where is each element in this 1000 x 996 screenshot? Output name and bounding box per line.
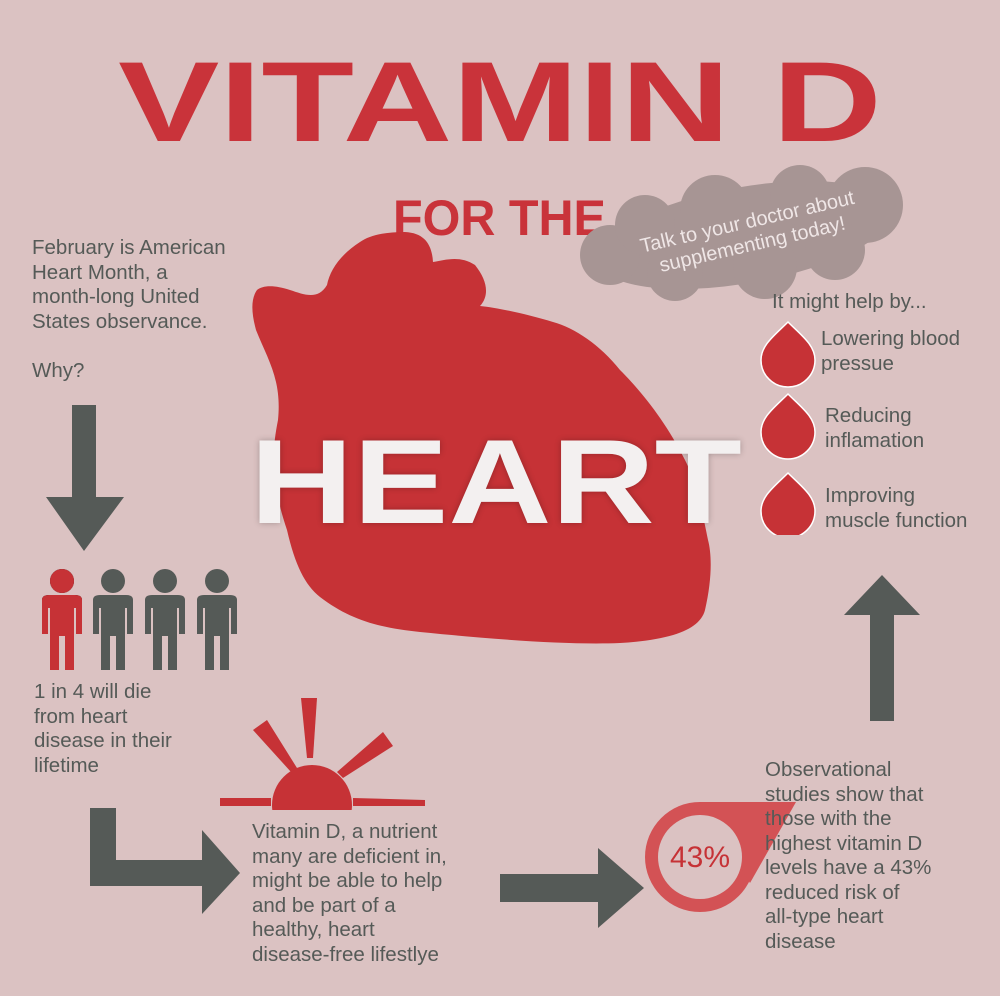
text: intro: Heart Month, a: [32, 260, 168, 284]
list: benefits: pressue: [821, 352, 894, 374]
text: observational: levels have a 43%: [765, 856, 931, 879]
list: benefits: Reducing: [825, 404, 912, 427]
text: vitamin D nutrient: and be part of a: [252, 894, 396, 916]
subtitle: for the: FOR THE: [393, 190, 606, 246]
arrow: right: [500, 848, 644, 928]
text: vitamin D nutrient: Vitamin D, a nutrient: [252, 820, 437, 843]
text: intro: [32, 236, 226, 382]
text: vitamin D nutrient: many are deficient in,: [252, 844, 447, 868]
text: observational: disease: [765, 930, 836, 952]
text: observational: [765, 758, 931, 952]
text: 1 in 4: 1 in 4 will die: [34, 680, 151, 703]
title: VITAMIN D: [118, 39, 882, 166]
cloud callout: Talk to your doctor about supplementing today!: [638, 187, 856, 277]
list: benefits: inflamation: [825, 428, 924, 452]
icon: sun: [220, 698, 425, 810]
text: observational: those with the: [765, 807, 892, 830]
arrow: up: [844, 575, 920, 721]
icon: 43% badge: [645, 802, 796, 912]
list: benefits: muscle function: [825, 508, 967, 532]
heading: HEART: HEART: [250, 415, 742, 549]
list: benefits: Improving: [825, 484, 915, 507]
text: observational: Observational: [765, 758, 891, 781]
text: vitamin D nutrient: healthy, heart: [252, 918, 375, 941]
text: 1 in 4: [34, 680, 172, 776]
text: intro: Why?: [32, 358, 84, 382]
text: 1 in 4: from heart: [34, 704, 127, 728]
text: vitamin D nutrient: disease-free lifestlye: [252, 942, 439, 966]
text: observational: highest vitamin D: [765, 832, 922, 854]
icon: people: [42, 569, 237, 670]
text: vitamin D nutrient: [252, 820, 447, 966]
text: it might help: It might help by...: [772, 290, 927, 313]
text: observational: all-type heart: [765, 905, 884, 928]
text: 1 in 4: lifetime: [34, 754, 99, 776]
icon: 43% badge: 43%: [670, 841, 730, 874]
text: vitamin D nutrient: might be able to help: [252, 869, 442, 892]
list: benefits: Lowering blood: [821, 327, 960, 350]
arrow: L-shaped right: [90, 808, 240, 914]
text: intro: February is American: [32, 236, 226, 259]
text: 1 in 4: disease in their: [34, 729, 172, 752]
arrow: down: [46, 405, 124, 551]
text: observational: reduced risk of: [765, 880, 899, 904]
cloud callout: [580, 165, 903, 301]
list: benefits: [760, 321, 967, 535]
text: intro: States observance.: [32, 310, 208, 332]
text: intro: month-long United: [32, 285, 200, 308]
text: observational: studies show that: [765, 782, 923, 806]
